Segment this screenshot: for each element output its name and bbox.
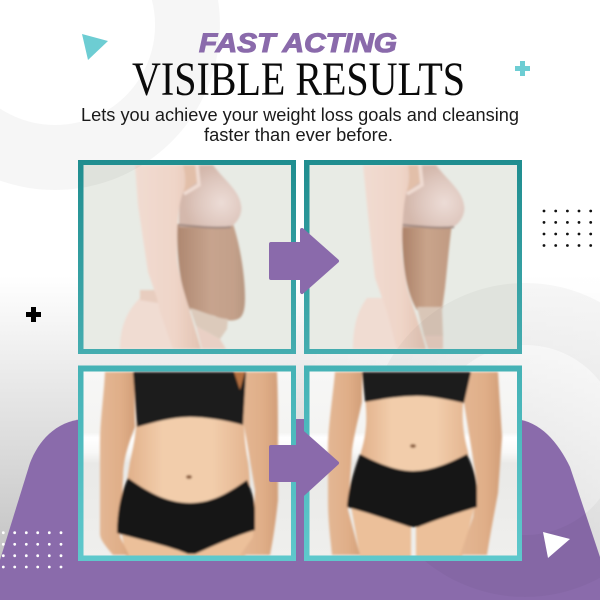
icon: teal plus	[515, 61, 530, 76]
icon: teal triangle	[82, 34, 108, 60]
purple base shape	[0, 419, 600, 600]
photo: side view torso before	[84, 165, 291, 349]
arrow: front view before to after	[271, 432, 337, 495]
dot grid: bottom left	[2, 531, 62, 568]
panel: side view before	[78, 160, 296, 354]
background ring: top left	[0, 0, 220, 190]
title: visible results: VISIBLE RESULTS	[132, 53, 465, 106]
frame: front before	[78, 366, 296, 561]
frame: side after	[304, 160, 522, 354]
photo: front torso before	[84, 372, 291, 557]
text block: description: faster than ever before.	[204, 125, 393, 145]
photo: front torso after	[310, 372, 517, 557]
arrow: side view before to after	[271, 230, 337, 292]
frame: front after	[304, 366, 522, 561]
panel: front view before	[78, 366, 296, 561]
ring overlay on top row photos	[84, 165, 142, 187]
panel: front view after	[304, 366, 522, 561]
text block: description	[81, 105, 519, 145]
icon: black plus	[26, 307, 41, 322]
heading: fast acting: FAST ACTING	[199, 28, 397, 58]
background ring: bottom right	[368, 283, 600, 597]
frame: side before	[78, 160, 296, 354]
icon: white triangle	[543, 532, 570, 558]
text block: description: Lets you achieve your weight loss goals and cleansing	[81, 105, 519, 125]
photo: side view torso after	[310, 165, 517, 349]
background lightening on the right side	[0, 270, 600, 600]
dot grid: top right	[543, 210, 592, 247]
panel: side view after	[304, 160, 522, 354]
